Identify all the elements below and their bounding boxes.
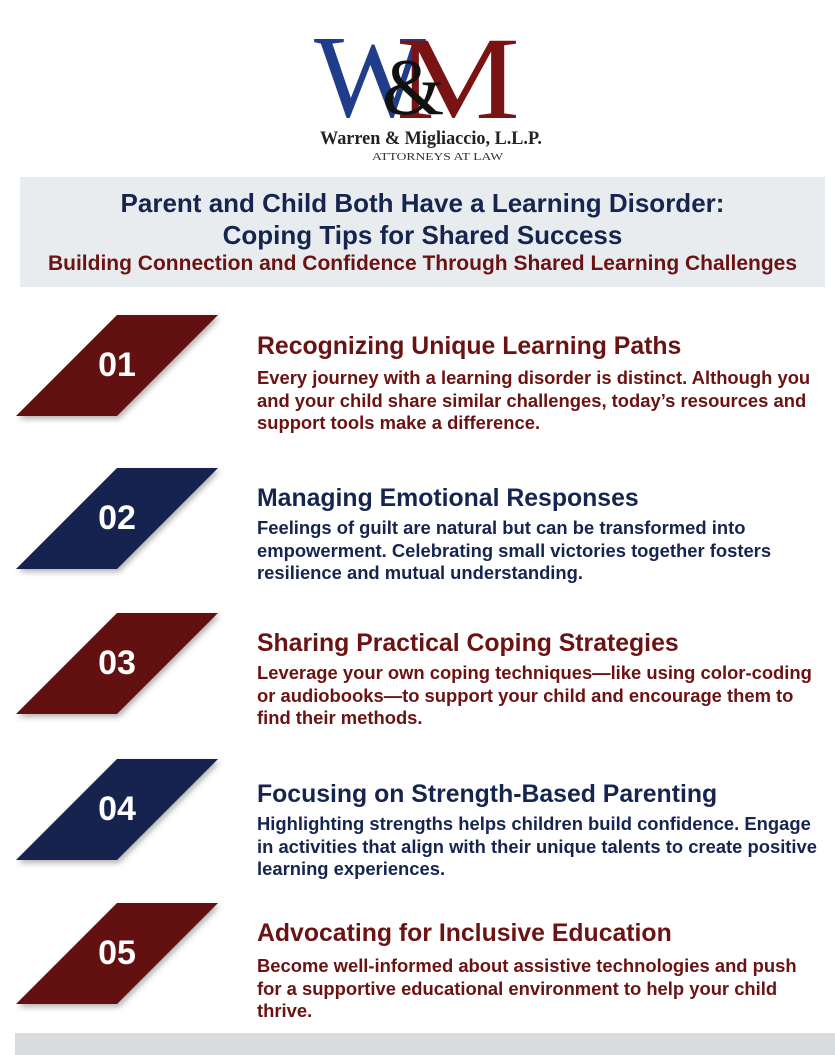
badge 05: 05 xyxy=(98,934,136,972)
logo xyxy=(314,24,542,163)
title xyxy=(121,188,724,250)
heading 03: Sharing Practical Coping Strategies xyxy=(257,630,679,657)
item 05 xyxy=(16,902,797,1021)
text 02: Feelings of guilt are natural but can be transformed into empowerment. Celebrating small victories together fosters resilience and mutual understanding. xyxy=(257,517,771,583)
badge 04 xyxy=(16,758,220,866)
badge 01: 01 xyxy=(98,346,136,384)
title: Coping Tips for Shared Success xyxy=(223,220,622,250)
text 05: Become well-informed about assistive technologies and push for a supportive educational environment to help your child thrive. xyxy=(257,955,797,1021)
badge 01 xyxy=(16,314,220,422)
title panel xyxy=(20,177,825,287)
text 04: Highlighting strengths helps children build confidence. Engage in activities that align with their unique talents to create positive learning experiences. xyxy=(257,813,817,879)
item 01 xyxy=(16,314,810,433)
heading 05: Advocating for Inclusive Education xyxy=(257,920,672,947)
text 01: Every journey with a learning disorder is distinct. Although you and your child share similar challenges, today’s resources and support tools make a difference. xyxy=(257,367,810,433)
title: Parent and Child Both Have a Learning Disorder: xyxy=(121,188,724,218)
logo: Warren & Migliaccio, L.L.P. xyxy=(320,128,542,149)
badge 03: 03 xyxy=(98,644,136,682)
heading 04: Focusing on Strength-Based Parenting xyxy=(257,781,717,808)
badge 05 xyxy=(16,902,220,1010)
text 03: Leverage your own coping techniques—like using color-coding or audiobooks—to support your child and encourage them to find their methods. xyxy=(257,662,812,728)
badge 02: 02 xyxy=(98,499,136,537)
heading 02: Managing Emotional Responses xyxy=(257,485,639,512)
item 03 xyxy=(16,612,812,728)
subtitle: Building Connection and Confidence Through Shared Learning Challenges xyxy=(48,252,797,275)
logo: ATTORNEYS AT LAW xyxy=(372,151,504,163)
badge 02 xyxy=(16,468,220,576)
logo: & xyxy=(382,44,444,132)
footer bar xyxy=(15,1033,835,1055)
badge 04: 04 xyxy=(98,790,136,828)
item 02 xyxy=(16,468,771,583)
heading 01: Recognizing Unique Learning Paths xyxy=(257,333,681,360)
badge 03 xyxy=(16,612,220,720)
item 04 xyxy=(16,758,817,879)
